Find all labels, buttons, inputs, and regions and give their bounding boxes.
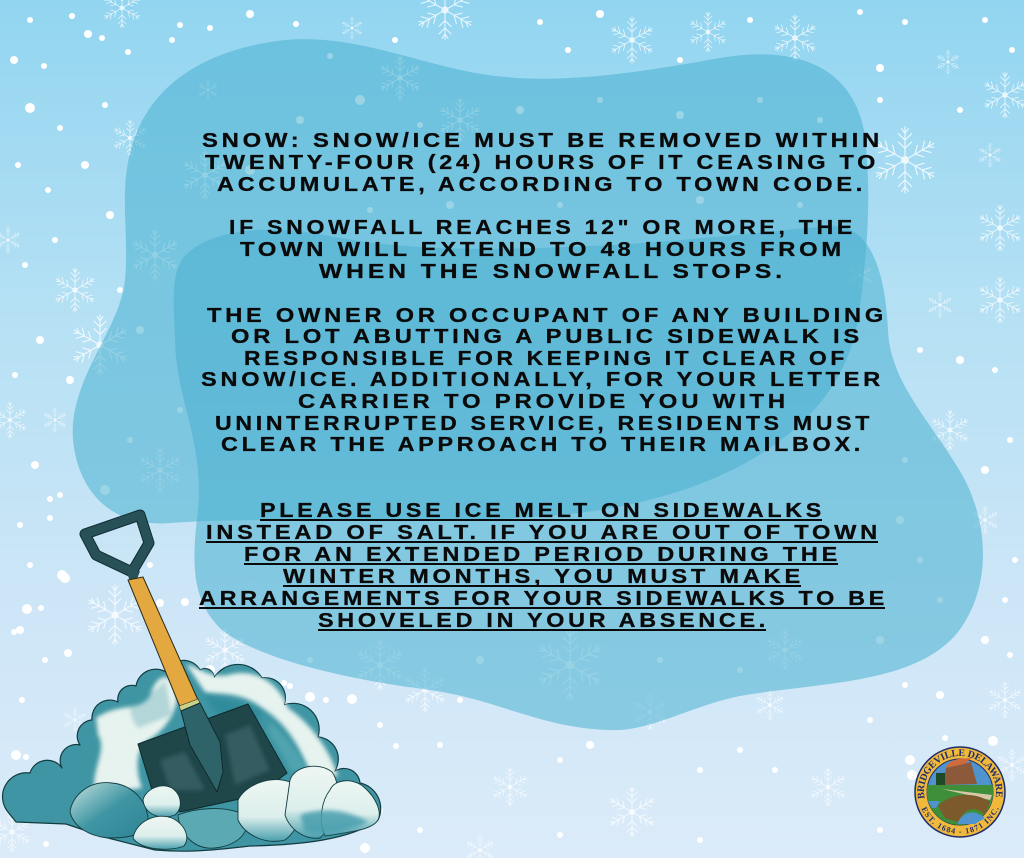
- paragraph: owner responsibility: THE OWNER OR OCCUPANT OF ANY BUILDING: [207, 305, 887, 327]
- background blob: upper: [73, 39, 868, 523]
- shovel handle: [85, 515, 149, 582]
- paragraph: ice melt, underlined: [199, 500, 888, 632]
- lump shading: [300, 810, 368, 834]
- shovel blade: [138, 704, 287, 812]
- paragraph: 12 inch extension: TOWN WILL EXTEND TO 48 HOURS FROM: [240, 239, 845, 261]
- background blob: lower: [174, 226, 983, 730]
- paragraph: snow removal deadline: [202, 130, 883, 196]
- paragraph: ice melt, underlined: PLEASE USE ICE MELT ON SIDEWALKS: [260, 500, 825, 522]
- paragraph: 12 inch extension: WHEN THE SNOWFALL STOPS.: [319, 261, 786, 283]
- paragraph: ice melt, underlined: FOR AN EXTENDED PERIOD DURING THE: [244, 544, 841, 566]
- shovel neck: [181, 703, 223, 792]
- paragraph: snow removal deadline: SNOW: SNOW/ICE MUST BE REMOVED WITHIN: [202, 130, 883, 152]
- paragraph: owner responsibility: SNOW/ICE. ADDITIONALLY, FOR YOUR LETTER: [201, 369, 884, 391]
- seal lettering: BRIDGEVILLE DELAWARE: [917, 749, 1003, 800]
- paragraph: ice melt, underlined: INSTEAD OF SALT. IF YOU ARE OUT OF TOWN: [206, 522, 881, 544]
- paragraph: ice melt, underlined: SHOVELED IN YOUR ABSENCE.: [318, 610, 769, 632]
- paragraph: snow removal deadline: TWENTY-FOUR (24) HOURS OF IT CEASING TO: [205, 152, 879, 174]
- paragraph: owner responsibility: CLEAR THE APPROACH TO THEIR MAILBOX.: [221, 434, 864, 456]
- paragraph: owner responsibility: RESPONSIBLE FOR KEEPING IT CLEAR OF: [244, 348, 848, 370]
- paragraph: owner responsibility: CARRIER TO PROVIDE YOU WITH: [298, 391, 789, 413]
- shovel shaft: [128, 577, 198, 707]
- paragraph: ice melt, underlined: WINTER MONTHS, YOU MUST MAKE: [283, 566, 804, 588]
- seal ring: [915, 747, 1005, 837]
- seal: Bridgeville Delaware: [914, 746, 1006, 838]
- foreground snow lumps: [70, 766, 379, 849]
- notice text: [199, 130, 888, 632]
- seal scene: [927, 758, 993, 825]
- shovel collar: [179, 699, 200, 711]
- paragraph: ice melt, underlined: ARRANGEMENTS FOR YOUR SIDEWALKS TO BE: [199, 588, 888, 610]
- paragraph: 12 inch extension: IF SNOWFALL REACHES 12" OR MORE, THE: [229, 217, 856, 239]
- seal founding dates: EST. 1684 - 1871 INC.: [922, 806, 999, 834]
- illustration: shovel in snow pile: [3, 515, 381, 851]
- paragraph: owner responsibility: OR LOT ABUTTING A PUBLIC SIDEWALK IS: [231, 326, 863, 348]
- paragraph: owner responsibility: [201, 305, 887, 456]
- snow pile: [3, 660, 381, 851]
- paragraph: 12 inch extension: [229, 217, 856, 283]
- paragraph: snow removal deadline: ACCUMULATE, ACCORDING TO TOWN CODE.: [217, 174, 866, 196]
- paragraph: owner responsibility: UNINTERRUPTED SERVICE, RESIDENTS MUST: [215, 413, 873, 435]
